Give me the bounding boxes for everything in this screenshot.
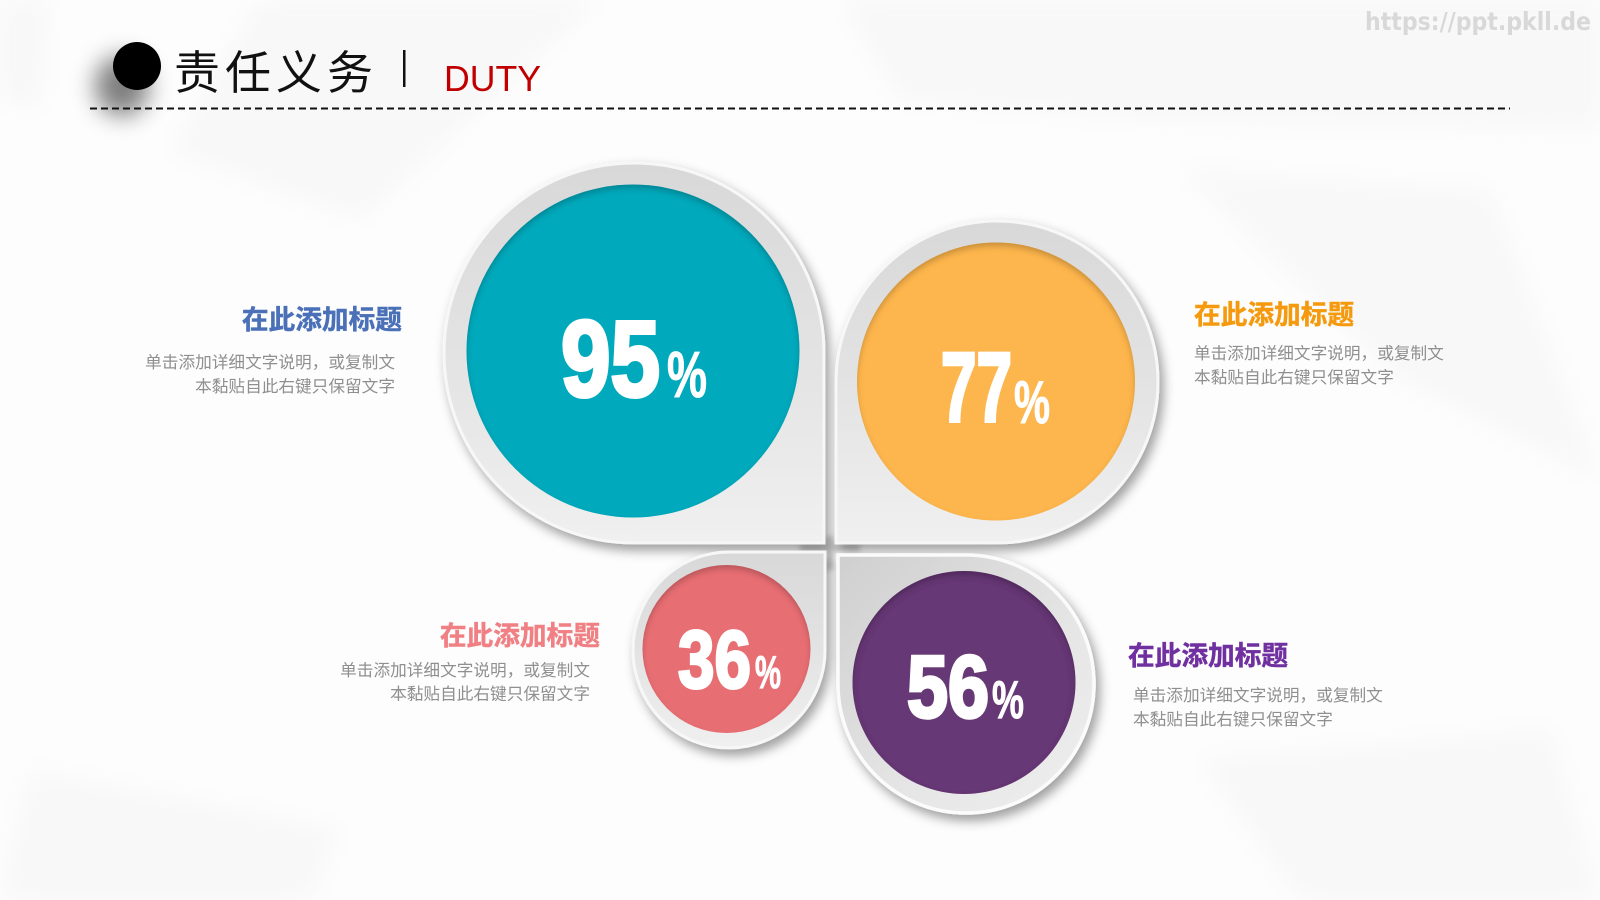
text block: orange label [1194,300,1444,387]
subtitle: DUTY [444,58,541,99]
teardrop ring [836,221,1158,543]
description: 本黏贴自此右键只保留文字 [195,377,395,396]
text block: red label [340,621,600,704]
value 56%: 56 [907,637,989,736]
description: 单击添加详细文字说明，或复制文 [1133,686,1383,705]
panel: 77% teardrop [836,221,1158,543]
description: 本黏贴自此右键只保留文字 [390,684,590,704]
title separator [403,50,406,87]
description: 本黏贴自此右键只保留文字 [1194,368,1394,387]
heading: 在此添加标题 [1194,300,1354,330]
text block: blue label [145,305,402,396]
heading: 在此添加标题 [242,305,402,335]
value 95%: % [667,338,707,411]
description: 单击添加详细文字说明，或复制文 [1194,344,1444,363]
heading: 在此添加标题 [440,621,600,651]
description: 单击添加详细文字说明，或复制文 [340,661,590,680]
description [145,353,395,396]
description: 单击添加详细文字说明，或复制文 [145,353,395,372]
purple disc [852,571,1076,794]
description [1194,344,1444,387]
panel: 56% teardrop [838,555,1094,813]
teal disc [466,184,800,518]
teardrop ring [838,555,1094,813]
title: 责任义务 [174,47,378,99]
value 36%: % [755,646,781,698]
value 56%: % [992,671,1024,730]
red disc [642,565,810,733]
description [340,661,590,704]
description: 本黏贴自此右键只保留文字 [1133,710,1333,729]
dashed header rule [90,108,1510,110]
value 95%: 95 [561,298,660,419]
panel: 95% teardrop [444,163,824,543]
text block: purple label [1128,641,1383,729]
description [1133,686,1383,729]
teardrop ring [633,552,825,748]
header [95,42,541,116]
orange disc [857,242,1135,520]
value 77%: 77 [941,332,1012,442]
value 36%: 36 [678,614,751,706]
teardrop ring [444,163,824,543]
panel: 36% teardrop [633,552,825,748]
icon: black dot with shadow [95,42,161,116]
heading: 在此添加标题 [1128,641,1288,671]
value 77%: % [1014,369,1050,436]
